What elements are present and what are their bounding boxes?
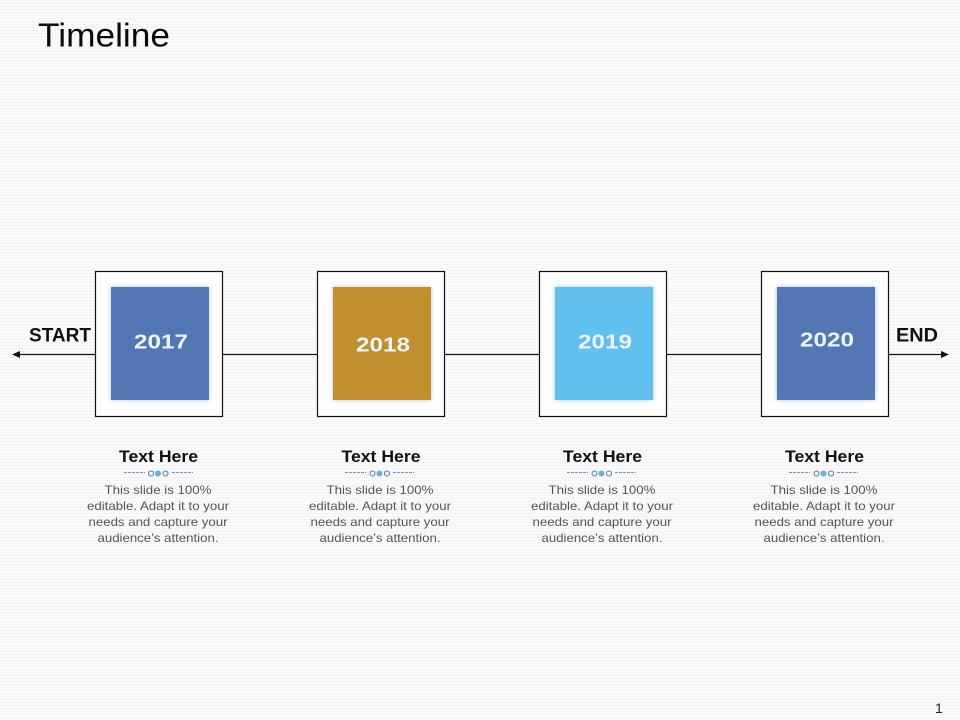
text block: 2017: Text Here: [119, 447, 198, 466]
year card: 2017: [96, 272, 222, 416]
year card: 2018: [318, 272, 444, 416]
text block: 2019: This slide is 100%: [548, 483, 656, 497]
title: Timeline: [38, 18, 170, 54]
text block: 2018: This slide is 100%: [326, 483, 434, 497]
divider ornament: [789, 470, 858, 476]
text block: 2020: audience’s attention.: [764, 531, 884, 545]
text block: 2018: needs and capture your: [310, 515, 450, 529]
text block: 2020: [753, 447, 895, 545]
year card: 2017: 2017: [134, 332, 188, 354]
text block: 2018: editable. Adapt it to your: [309, 499, 451, 513]
divider ornament: [124, 470, 193, 476]
year card: 2018: 2018: [356, 334, 410, 356]
text block: 2019: editable. Adapt it to your: [531, 499, 673, 513]
text block: 2017: [87, 447, 229, 545]
text block: 2020: Text Here: [785, 447, 864, 466]
end label: END: [896, 324, 938, 346]
text block: 2020: This slide is 100%: [770, 483, 878, 497]
text block: 2018: Text Here: [342, 447, 420, 466]
text block: 2018: [309, 447, 451, 545]
text block: 2019: Text Here: [563, 447, 642, 466]
page number: 1: [935, 700, 943, 716]
text block: 2020: editable. Adapt it to your: [753, 499, 895, 513]
start label: START: [29, 324, 91, 346]
year card: 2020: 2020: [800, 330, 854, 352]
text block: 2017: audience’s attention.: [98, 531, 218, 545]
text block: 2017: editable. Adapt it to your: [87, 499, 229, 513]
year card: 2019: 2019: [578, 332, 632, 354]
timeline arrow line: [12, 351, 949, 358]
text block: 2018: audience’s attention.: [320, 531, 440, 545]
text block: 2019: needs and capture your: [532, 515, 672, 529]
text block: 2019: [531, 447, 673, 545]
text block: 2019: audience’s attention.: [542, 531, 662, 545]
text block: 2017: needs and capture your: [88, 515, 228, 529]
year card: 2020: [762, 272, 888, 416]
text block: 2017: This slide is 100%: [104, 483, 212, 497]
divider ornament: [567, 470, 636, 476]
divider ornament: [345, 470, 414, 476]
text block: 2020: needs and capture your: [754, 515, 894, 529]
year card: 2019: [540, 272, 666, 416]
